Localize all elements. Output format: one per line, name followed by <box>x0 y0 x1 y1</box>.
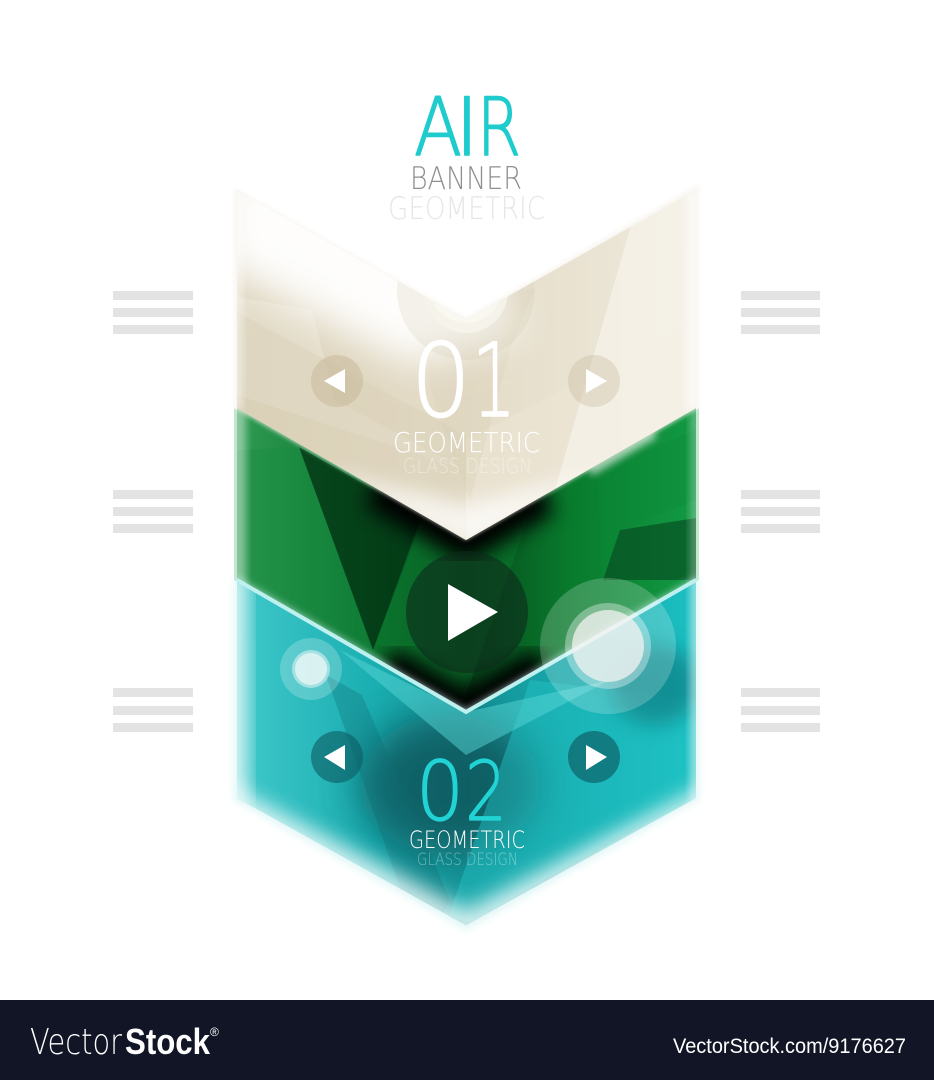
icon: left arrow button teal <box>311 731 363 783</box>
logo: Stock: Stock <box>125 1021 211 1062</box>
panel: green chevron <box>228 400 702 720</box>
panel: beige chevron <box>234 187 699 542</box>
teal top border <box>237 580 696 712</box>
icon: left arrow button beige <box>311 355 363 407</box>
footer URL: VectorStock.com/9176627 <box>673 1035 906 1058</box>
number: 02: 0 <box>416 745 464 840</box>
title word: AIR: A <box>414 81 462 174</box>
number: 01: 0 <box>411 322 471 441</box>
title <box>388 81 545 227</box>
panel: teal chevron <box>222 570 710 950</box>
icon: play button <box>406 551 528 673</box>
title word: AIR: R <box>477 81 521 174</box>
logo: Vector: Vector <box>30 1022 122 1063</box>
icon: right arrow button teal <box>568 731 620 783</box>
left placeholder text lines <box>113 291 193 732</box>
logo: registered mark: ® <box>210 1025 219 1039</box>
icon: glass circle small <box>280 638 342 700</box>
label: GEOMETRIC: GEOMETRIC <box>409 826 525 854</box>
number: 01 <box>411 322 516 441</box>
subtitle: BANNER: BANNER <box>410 161 522 197</box>
title word: AIR: I <box>455 81 479 174</box>
decorative circle: top <box>397 282 535 360</box>
label: GLASS DESIGN: GLASS DESIGN <box>403 454 532 478</box>
number: 02 <box>416 745 507 840</box>
icon: right arrow button beige <box>568 355 620 407</box>
label: GLASS DESIGN: GLASS DESIGN <box>417 850 518 870</box>
right placeholder text lines <box>741 291 820 732</box>
footer bar <box>0 1000 934 1080</box>
title word: AIR <box>414 81 521 174</box>
number: 02: 2 <box>465 745 507 840</box>
icon: glass circle large <box>540 578 676 714</box>
number: 01: 1 <box>472 322 516 441</box>
subtitle: GEOMETRIC: GEOMETRIC <box>388 191 545 227</box>
label: GEOMETRIC: GEOMETRIC <box>393 426 540 459</box>
